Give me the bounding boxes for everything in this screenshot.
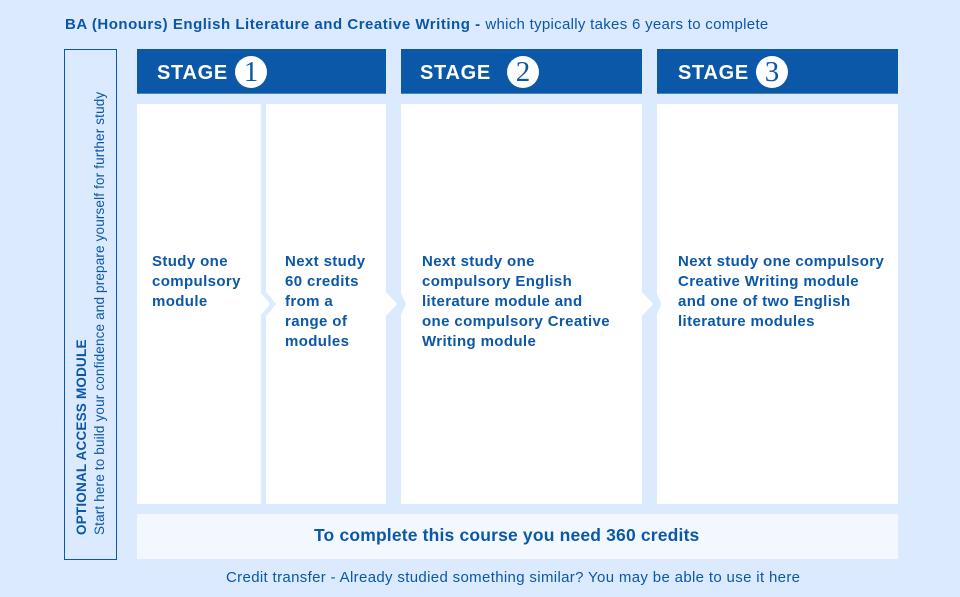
arrow: step 1 to step 2: [261, 292, 276, 316]
text: stage 2 modules: literature module and: [422, 293, 583, 310]
text: stage 3 modules: [678, 253, 884, 330]
stage 1 number: [235, 56, 267, 88]
stage 2 header: [401, 49, 642, 94]
stage 2 number: [507, 56, 539, 88]
text: study one compulsory module: Study one: [152, 253, 228, 270]
stage 3 number: [756, 56, 788, 88]
panel: stage 1 first step: [137, 104, 261, 504]
text: next study 60 credits: [285, 253, 366, 350]
panel: stage 1 second step: [266, 104, 386, 504]
text: next study 60 credits: modules: [285, 333, 349, 350]
text: stage 3 modules: Creative Writing module: [678, 273, 859, 290]
stage 1 label: STAGE: [157, 62, 228, 84]
text: stage 2 modules: Next study one: [422, 253, 535, 270]
text: study one compulsory module: [152, 253, 241, 310]
text: stage 2 modules: compulsory English: [422, 273, 572, 290]
callout: credits needed: To complete this course you need 360 credits: [314, 525, 699, 545]
access module text: OPTIONAL ACCESS MODULE: [74, 339, 89, 535]
text: next study 60 credits: 60 credits: [285, 273, 359, 290]
arrow: step 2 to stage 2: [386, 292, 406, 316]
access module text: Start here to build your confidence and prepare yourself for further study: [92, 92, 107, 535]
footer: credit transfer: Credit transfer - Already studied something similar? You may be able to use it here: [226, 569, 800, 586]
stage 3 header: [657, 49, 898, 94]
stage 1 number: 1: [244, 56, 258, 88]
stage 1 header: [137, 49, 386, 94]
text: stage 2 modules: one compulsory Creative: [422, 313, 610, 330]
text: stage 3 modules: literature modules: [678, 313, 815, 330]
panel: optional access module: [64, 49, 117, 560]
text: study one compulsory module: compulsory: [152, 273, 241, 290]
text: stage 3 modules: and one of two English: [678, 293, 851, 310]
callout: credits needed: [137, 514, 898, 559]
text: next study 60 credits: range of: [285, 313, 347, 330]
title: BA (Honours) English Literature and Creative Writing - which typically takes 6 years to complete: [65, 16, 769, 33]
text: next study 60 credits: Next study: [285, 253, 366, 270]
stage 2 number: 2: [516, 56, 530, 88]
text: next study 60 credits: from a: [285, 293, 333, 310]
stage 2 label: STAGE: [420, 62, 491, 84]
panel: stage 2: [401, 104, 642, 504]
access module text: [74, 92, 107, 535]
text: stage 3 modules: Next study one compulsory: [678, 253, 884, 270]
text: stage 2 modules: [422, 253, 610, 350]
text: stage 2 modules: Writing module: [422, 333, 536, 350]
stage 3 number: 3: [765, 56, 779, 88]
stage 3 label: STAGE: [678, 62, 749, 84]
arrow: stage 2 to stage 3: [642, 292, 661, 316]
text: study one compulsory module: module: [152, 293, 208, 310]
panel: stage 3: [657, 104, 898, 504]
